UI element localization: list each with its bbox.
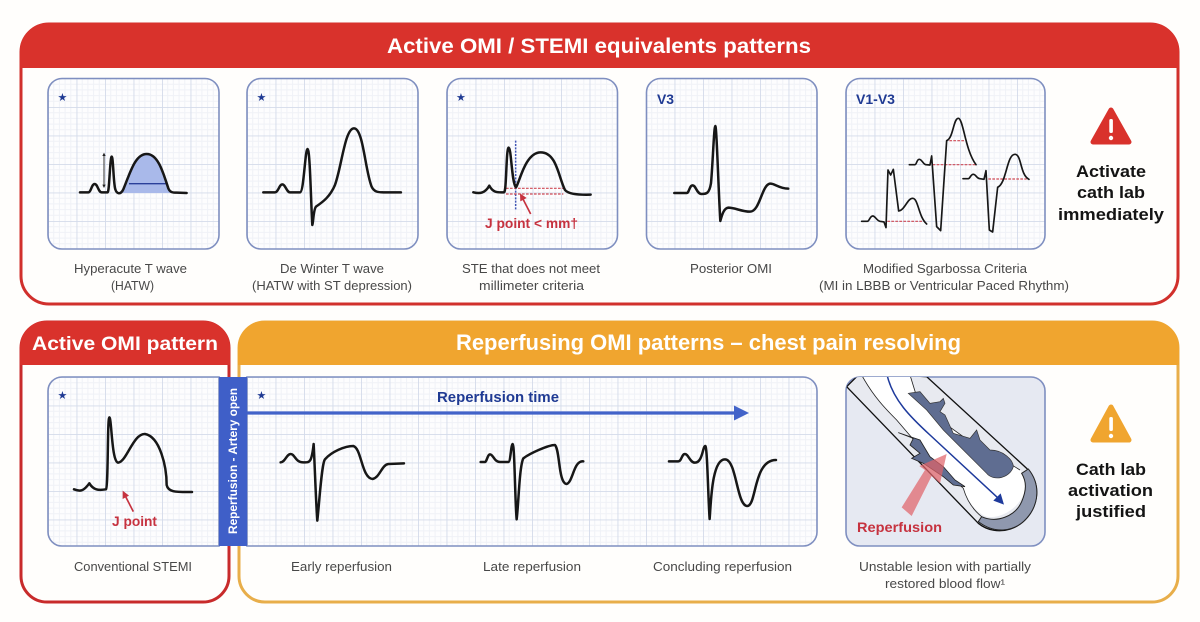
ECG: concluding reperfusion	[669, 446, 776, 519]
card: STE below millimeter criteria	[447, 78, 618, 249]
arrow: reperfusion time: Reperfusion time	[437, 390, 559, 406]
caption: late reperfusion: Late reperfusion	[483, 560, 581, 574]
caption: modified Sgarbossa criteria: Modified Sgarbossa Criteria	[863, 262, 1027, 276]
star marker: ★	[256, 91, 266, 104]
card: conventional STEMI	[48, 377, 219, 546]
caption: unstable lesion: Unstable lesion with partially	[859, 560, 1032, 574]
label: reperfusion: Reperfusion	[857, 519, 942, 535]
card: unstable lesion illustration	[846, 373, 1045, 546]
panel: reperfusing OMI patterns	[238, 321, 1179, 602]
caption: hyperacute T wave: Hyperacute T wave	[74, 262, 187, 276]
caption: hyperacute T wave	[74, 262, 187, 293]
heading bar: active OMI pattern: Active OMI pattern	[32, 333, 218, 355]
call to action: cath lab activation justified	[1068, 461, 1153, 521]
star marker: ★	[58, 389, 68, 402]
call to action: activate cath lab immediately: immediately	[1058, 206, 1165, 224]
ECG: late reperfusion	[481, 444, 583, 519]
ECG: hyperacute T wave	[80, 153, 187, 193]
heading bar: reperfusing OMI patterns	[238, 321, 1179, 365]
caption: De Winter T wave: (HATW with ST depression)	[252, 279, 412, 293]
caption: posterior OMI: Posterior OMI	[690, 262, 772, 276]
label: J point: J point	[112, 513, 157, 529]
label: J point less than mm: J point < mm†	[485, 215, 578, 231]
ECG: subtle ST elevation with J point	[473, 141, 591, 214]
arrow: reperfusion time	[247, 390, 749, 420]
star marker: ★	[256, 389, 266, 402]
caption: De Winter T wave: De Winter T wave	[280, 262, 384, 276]
card: modified Sgarbossa criteria	[846, 78, 1045, 249]
heading bar: active OMI / STEMI equivalents patterns: Active OMI / STEMI equivalents patterns	[387, 35, 811, 58]
heading bar: active OMI / STEMI equivalents patterns	[20, 23, 1179, 68]
panel: active OMI pattern	[20, 321, 230, 602]
caption: modified Sgarbossa criteria: (MI in LBBB or Ventricular Paced Rhythm)	[819, 279, 1069, 293]
card: De Winter T wave	[247, 78, 418, 249]
caption: concluding reperfusion: Concluding reperfusion	[653, 560, 792, 574]
call to action: cath lab activation justified: justified	[1075, 503, 1146, 521]
caption: early reperfusion: Early reperfusion	[291, 560, 392, 574]
ECG: posterior OMI	[674, 126, 788, 221]
caption: STE not meeting criteria: STE that does not meet	[462, 262, 601, 276]
panel: active OMI / STEMI equivalents	[20, 23, 1179, 304]
caption: De Winter T wave	[252, 262, 412, 293]
icon: orange warning triangle	[1093, 407, 1129, 440]
band: reperfusion - artery open: Reperfusion - Artery open	[228, 388, 240, 534]
ECG: conventional STEMI	[74, 417, 192, 512]
band: reperfusion - artery open	[219, 377, 247, 546]
icon: red warning triangle	[1093, 110, 1129, 142]
call to action: activate cath lab immediately	[1058, 163, 1165, 224]
caption: hyperacute T wave: (HATW)	[111, 279, 154, 293]
lead label V3: V3	[657, 92, 675, 107]
card: reperfusion time series	[247, 377, 817, 546]
heading bar: active OMI pattern	[20, 321, 230, 365]
call to action: activate cath lab immediately: cath lab	[1077, 184, 1145, 202]
call to action: activate cath lab immediately: Activate	[1076, 163, 1146, 181]
card: hyperacute T wave	[48, 78, 219, 249]
star marker: ★	[58, 91, 68, 104]
star marker: ★	[456, 91, 466, 104]
caption: unstable lesion: restored blood flow¹	[885, 577, 1005, 591]
lead label V1-V3: V1-V3	[856, 92, 896, 107]
caption: conventional STEMI: Conventional STEMI	[74, 560, 192, 574]
card: posterior OMI	[646, 78, 817, 249]
ECG: early reperfusion	[281, 444, 404, 521]
heading bar: reperfusing OMI patterns: Reperfusing OMI patterns – chest pain resolving	[456, 330, 961, 355]
call to action: cath lab activation justified: activation	[1068, 482, 1153, 500]
caption: modified Sgarbossa criteria	[819, 262, 1069, 293]
caption: unstable lesion	[859, 560, 1032, 591]
ECG: De Winter T wave	[263, 128, 401, 225]
caption: STE not meeting criteria	[462, 262, 601, 293]
ECG: three Sgarbossa leads	[862, 118, 1029, 232]
caption: STE not meeting criteria: millimeter criteria	[479, 279, 584, 293]
call to action: cath lab activation justified: Cath lab	[1076, 461, 1146, 479]
